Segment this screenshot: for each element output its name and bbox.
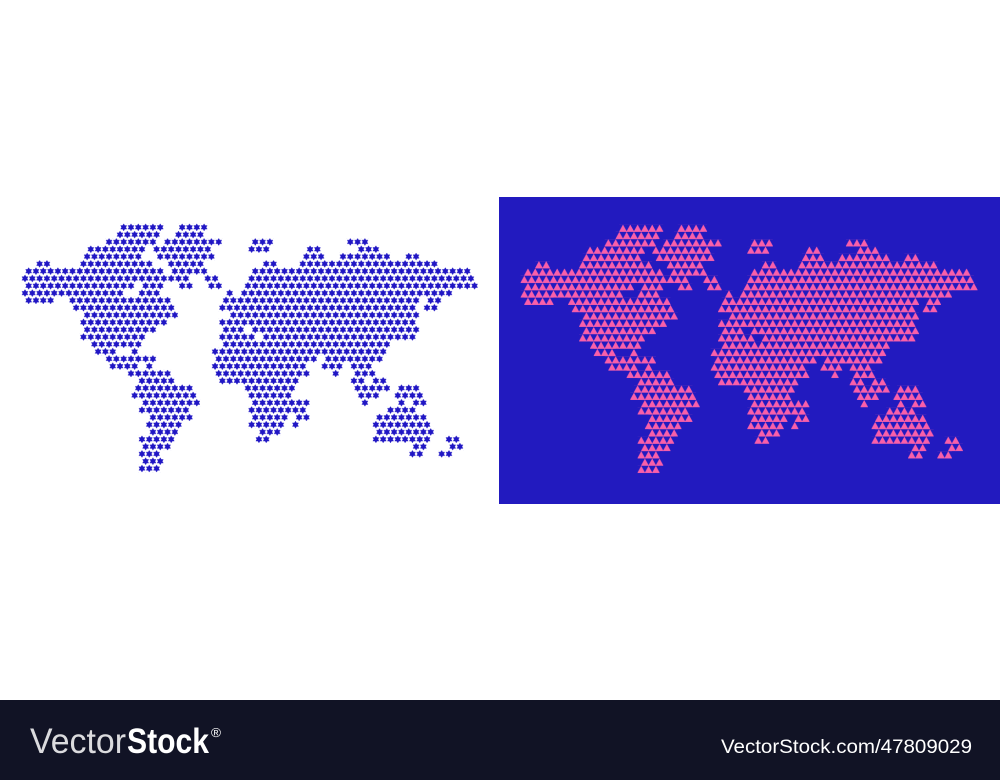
footer background	[0, 700, 1000, 780]
blue panel background	[499, 197, 1000, 504]
panel: blue background with triangle world map	[499, 197, 1000, 504]
triangle world map	[521, 225, 978, 473]
VectorStock logo wordmark: ®	[211, 725, 221, 740]
footer bar	[0, 700, 1000, 780]
VectorStock logo wordmark	[30, 722, 221, 761]
VectorStock logo wordmark: Stock	[127, 722, 209, 761]
image id url: VectorStock.com/47809029	[721, 737, 972, 758]
VectorStock logo wordmark: Vector	[30, 722, 126, 761]
star dot world map on white	[21, 224, 478, 472]
